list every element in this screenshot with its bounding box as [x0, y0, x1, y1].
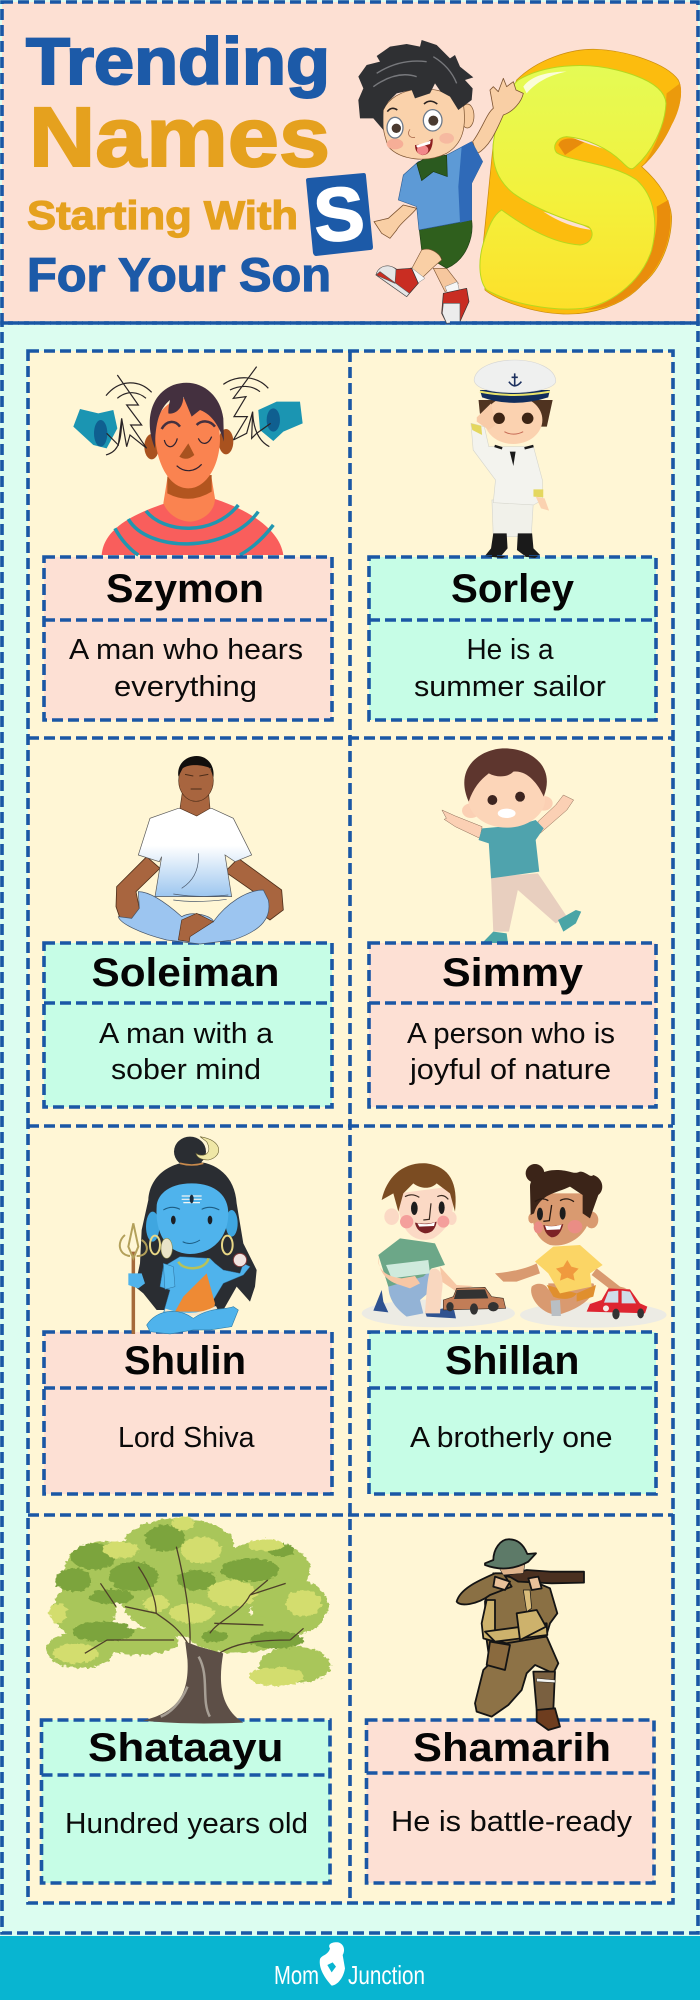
card: Sorley — [369, 360, 656, 720]
name: Simmy — [442, 951, 584, 995]
brown car — [443, 1287, 506, 1310]
illustration: man with megaphones — [73, 367, 303, 555]
meaning: He is a — [466, 634, 554, 666]
name: Shillan — [445, 1339, 580, 1383]
illustration: Lord Shiva — [120, 1137, 257, 1334]
title: Starting With — [27, 194, 298, 238]
meaning: A man with a — [99, 1018, 274, 1050]
meaning: He is battle-ready — [391, 1806, 633, 1838]
title: Names — [29, 90, 330, 184]
logo: Junction — [348, 1960, 425, 1990]
title: Trending — [26, 24, 330, 98]
icon: blue S tile: S — [311, 170, 367, 258]
meaning — [69, 634, 303, 703]
name: Szymon — [106, 567, 264, 611]
name box — [369, 557, 656, 720]
card: Shataayu — [42, 1517, 331, 1883]
head — [146, 1212, 159, 1242]
card: Szymon — [44, 367, 332, 720]
meaning: A person who is — [407, 1018, 615, 1050]
illustration: sailor — [471, 360, 556, 557]
illustration: kneeling soldier — [457, 1539, 584, 1730]
hair — [358, 40, 473, 130]
name box — [44, 943, 332, 1107]
boots over box edge — [484, 556, 538, 558]
illustration: joyful boy — [442, 748, 581, 944]
illustration: two boys playing with toy cars — [362, 1163, 667, 1328]
card: Soleiman — [44, 756, 332, 1107]
illustration: old tree — [47, 1517, 330, 1723]
socks — [407, 267, 460, 295]
trident — [132, 1252, 135, 1334]
lower arm — [374, 205, 417, 238]
left boy — [373, 1290, 456, 1318]
illustration: meditating man — [116, 756, 283, 944]
shoes — [376, 266, 418, 297]
card: Shamarih — [366, 1539, 655, 1883]
card: Simmy — [369, 748, 656, 1107]
mouth — [415, 138, 433, 155]
name box — [44, 557, 332, 720]
footer band — [0, 1936, 700, 2000]
meaning — [414, 634, 606, 703]
name box — [369, 943, 656, 1107]
card: Shulin — [44, 1137, 332, 1494]
name box — [44, 1332, 332, 1494]
shorts — [419, 220, 472, 268]
name: Shataayu — [88, 1726, 284, 1770]
header panel — [2, 2, 698, 323]
meaning — [407, 1018, 615, 1086]
card: Shillan — [362, 1163, 667, 1494]
name box — [369, 1332, 656, 1494]
names grid — [28, 351, 673, 1903]
body — [160, 1257, 250, 1313]
meaning: A brotherly one — [410, 1422, 612, 1454]
name: Soleiman — [92, 951, 280, 995]
raised arm — [473, 78, 523, 154]
meaning: everything — [114, 671, 257, 703]
sound waves — [106, 367, 271, 455]
meaning: Hundred years old — [65, 1808, 308, 1840]
icon: big 3D letter S — [480, 49, 681, 314]
meaning: joyful of nature — [409, 1054, 611, 1086]
name box — [42, 1720, 330, 1883]
meaning: summer sailor — [414, 671, 606, 703]
eyes — [387, 117, 403, 138]
legs — [433, 268, 458, 292]
right boy — [495, 1263, 540, 1282]
name: Shamarih — [413, 1726, 611, 1770]
meaning: A man who hears — [69, 634, 303, 666]
icon: mother and child — [320, 1942, 345, 1986]
red car — [587, 1288, 647, 1313]
meaning — [99, 1018, 274, 1086]
icon: waving boy — [358, 40, 523, 323]
head — [461, 104, 474, 128]
name: Sorley — [451, 567, 575, 611]
title: For Your Son — [27, 248, 331, 301]
megaphones — [73, 409, 117, 448]
meaning: Lord Shiva — [118, 1422, 255, 1454]
logo — [274, 1942, 425, 1990]
name: Shulin — [124, 1339, 246, 1383]
title — [26, 24, 331, 301]
shirt — [398, 142, 483, 230]
name box — [366, 1720, 654, 1883]
logo: Mom — [274, 1960, 319, 1990]
meaning: sober mind — [111, 1054, 261, 1086]
